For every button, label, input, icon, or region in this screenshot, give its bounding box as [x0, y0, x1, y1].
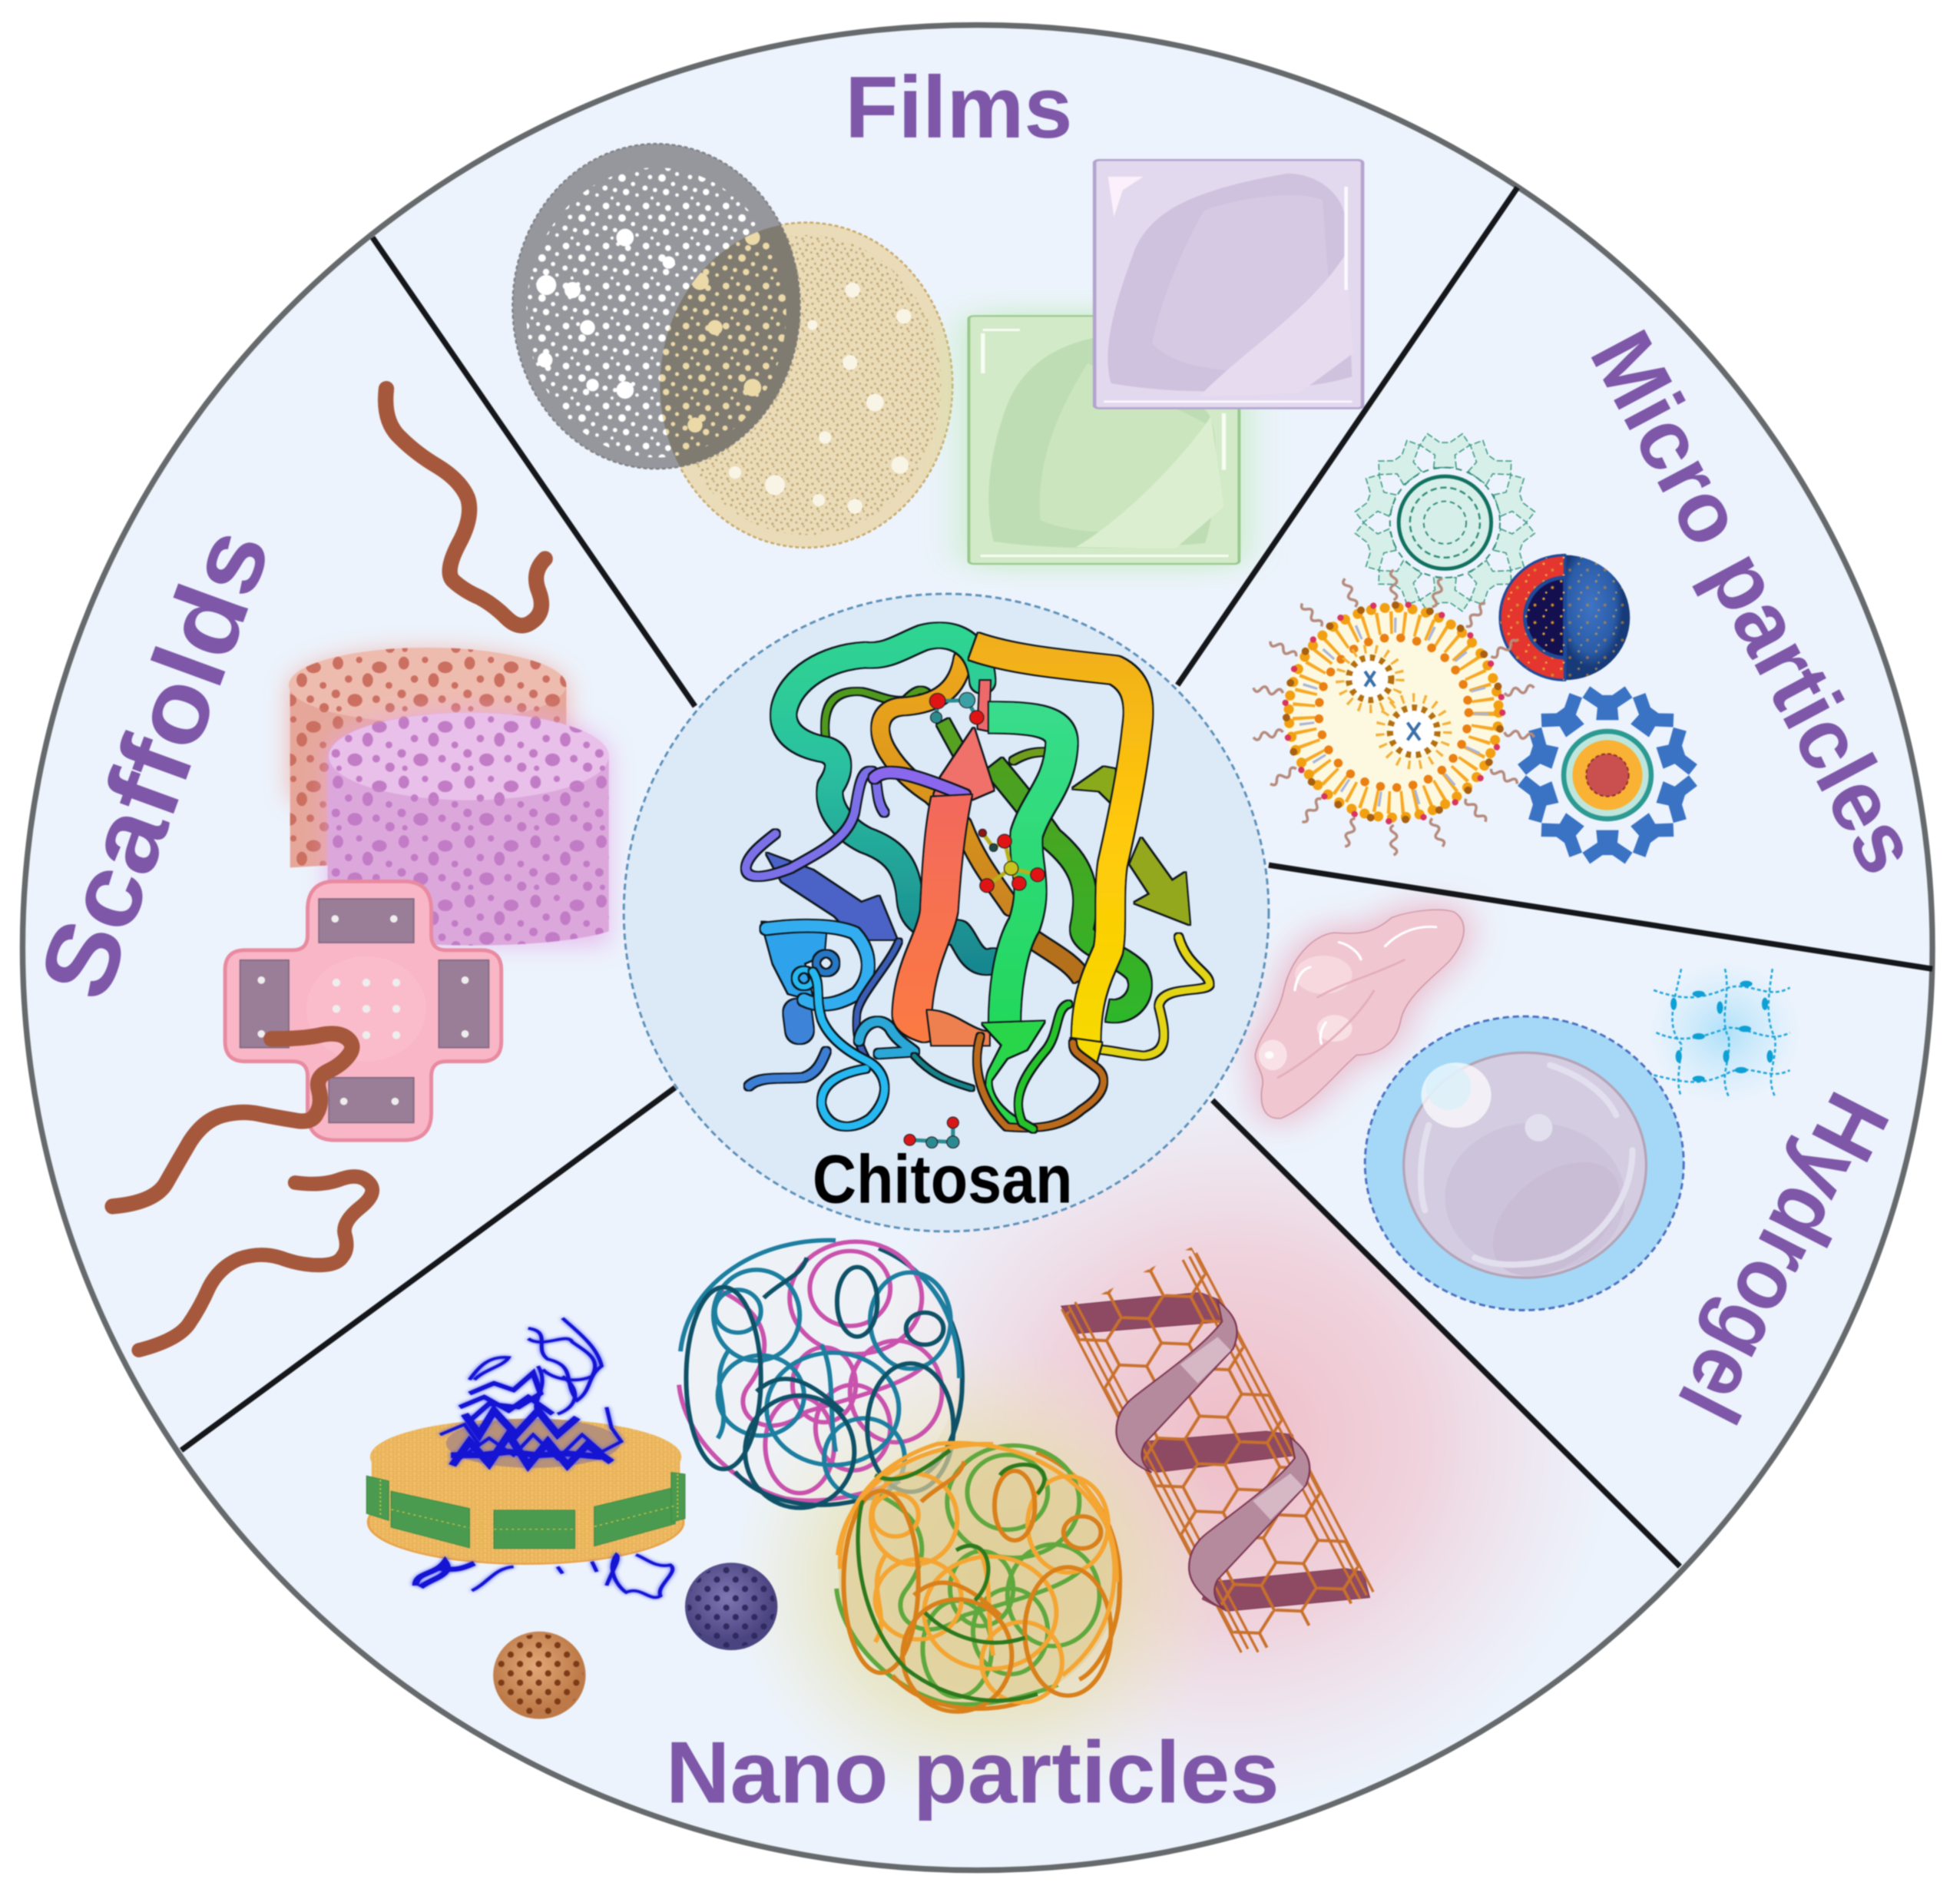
sector dividers [181, 187, 1932, 1566]
background glows [753, 1123, 1553, 1793]
ligand molecules [904, 692, 1045, 1148]
heading: Films: Films [845, 59, 1072, 157]
panel: central chitosan [624, 594, 1269, 1231]
icon: blue core-shell microgel [1515, 686, 1700, 864]
icon: hydrogel sphere [1365, 1016, 1684, 1311]
panel: micro particles [1253, 316, 1938, 889]
icon: pink hydrogel blob [1255, 910, 1464, 1119]
panel: nano particles [366, 1062, 1619, 1822]
icon: orange and green polymer nanogel [836, 1443, 1120, 1712]
icon: carbon nanotube wrapped by ribbon [1061, 1242, 1373, 1659]
icon: purple film square [1094, 160, 1362, 408]
protein ribbon structure [746, 635, 1210, 1148]
icon: nanodisc with blue polymer [366, 1318, 685, 1598]
icon: brown polymer strand bottom [139, 1176, 372, 1351]
icon: red porous cylinder [289, 648, 566, 867]
icon: brown polymer strand middle [113, 1034, 352, 1206]
icon: grey porous film [512, 144, 800, 469]
icon: purple porous sphere [685, 1563, 777, 1650]
icon: cross-shaped patch [225, 881, 502, 1140]
label: Chitosan: Chitosan [813, 1141, 1072, 1218]
icon: half-section blue sphere [1500, 555, 1630, 680]
panel: hydrogel [1255, 910, 1909, 1438]
icon: purple porous cylinder [328, 712, 609, 946]
panel: scaffolds [17, 389, 609, 1351]
icon: lipid micelle with vesicles [1253, 570, 1535, 855]
heading: Micro particles: Micro particles [1571, 316, 1938, 889]
icon: green film square [968, 316, 1239, 564]
icon: brown porous sphere [493, 1632, 586, 1719]
icon: tan porous film [660, 223, 952, 548]
panel: films [512, 59, 1362, 564]
icon: pale teal microgel [1352, 434, 1537, 611]
icon: teal and pink polymer nanogel [679, 1240, 962, 1508]
icon: brown polymer strand top [386, 389, 545, 625]
heading: Nano particles: Nano particles [666, 1725, 1280, 1822]
heading: Scaffolds: Scaffolds [17, 513, 293, 1013]
icon: hydrogel network [1647, 960, 1803, 1105]
center circle [624, 594, 1269, 1231]
heading: Hydrogel: Hydrogel [1659, 1078, 1909, 1438]
